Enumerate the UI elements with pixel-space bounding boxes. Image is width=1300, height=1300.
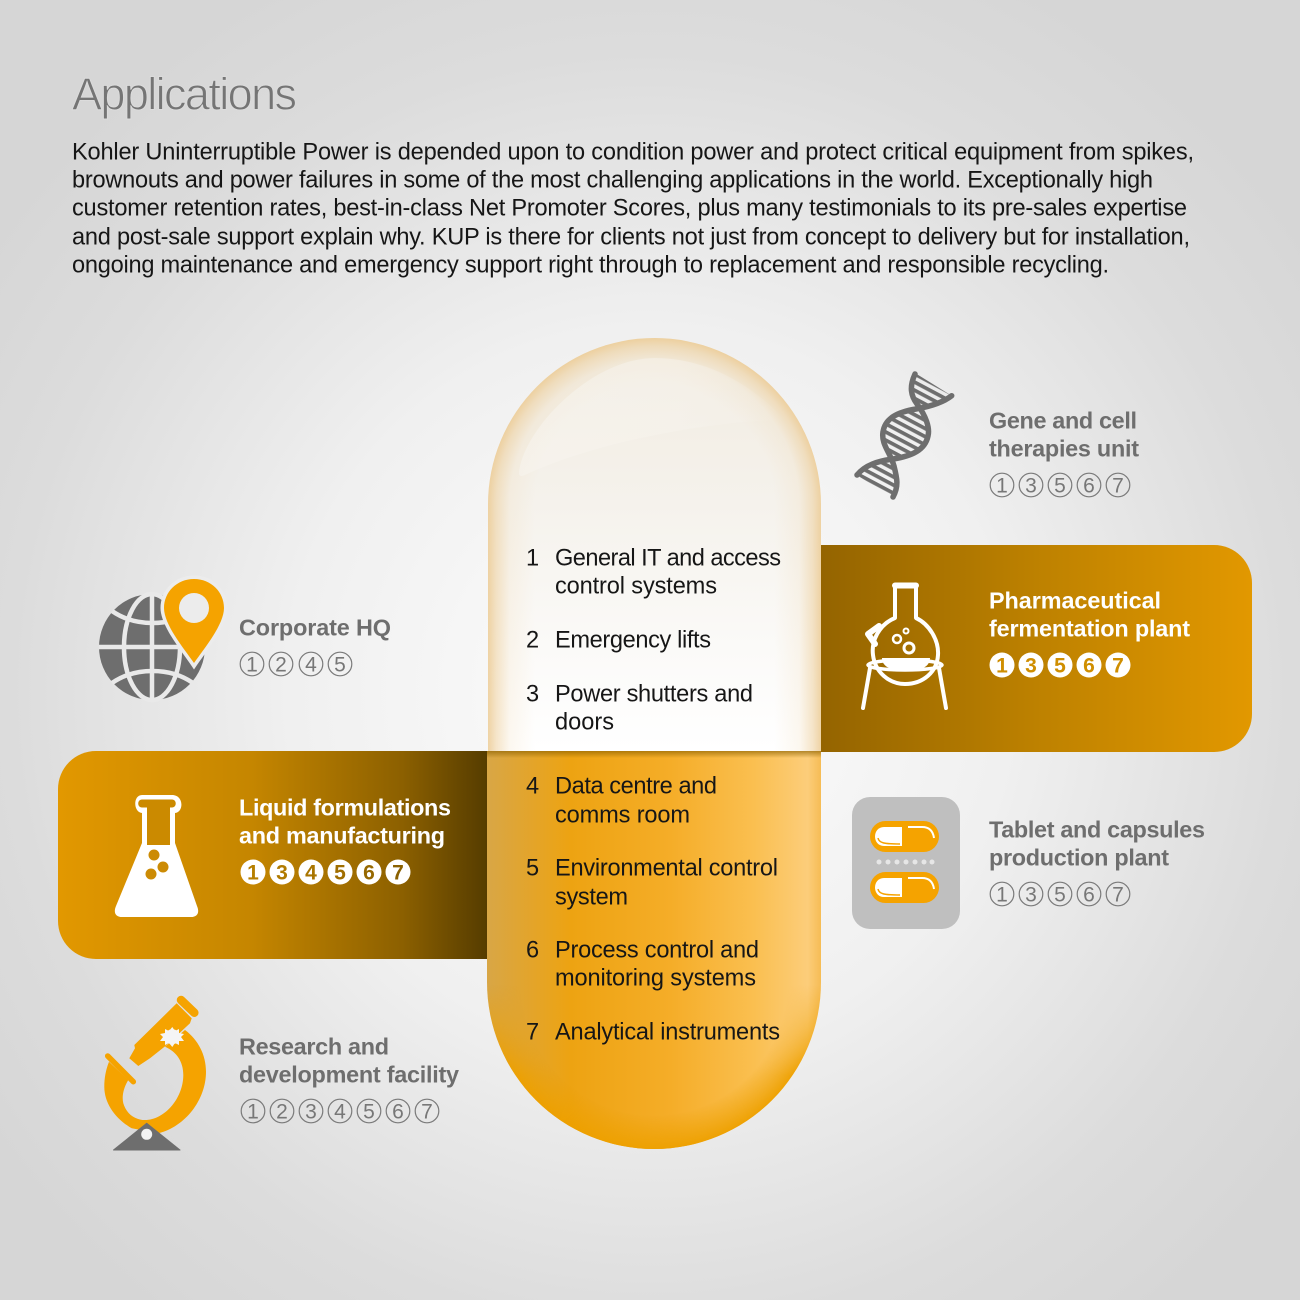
label: tablet and capsules: production plant xyxy=(989,844,1169,870)
intro text block: customer retention rates, best-in-class Net Promoter Scores, plus many testimonials to its pre-sales expertise xyxy=(72,195,1187,221)
reference numbers: 7 xyxy=(421,1100,433,1124)
reference numbers xyxy=(240,652,352,676)
icon: tablets and capsules xyxy=(852,797,960,929)
item 5: system xyxy=(555,884,628,910)
intro text block: and post-sale support explain why. KUP is there for clients not just from concept to delivery but for installation, xyxy=(72,224,1190,250)
capsule xyxy=(487,338,821,1149)
item 1: General IT and access xyxy=(555,545,781,571)
capsule upper half xyxy=(488,338,821,751)
reference numbers: 1 xyxy=(246,654,258,676)
reference numbers: 1 xyxy=(247,862,259,884)
label: research and development: Research and xyxy=(239,1033,389,1059)
item 1: 1 xyxy=(526,545,539,571)
label: corporate HQ xyxy=(239,614,391,676)
reference numbers: 5 xyxy=(363,1100,375,1124)
reference numbers: 4 xyxy=(305,862,317,884)
item 5 xyxy=(526,855,778,910)
reference numbers: 6 xyxy=(392,1100,404,1124)
reference numbers: 2 xyxy=(275,654,287,676)
reference numbers xyxy=(240,860,410,884)
title: Applications xyxy=(72,68,297,120)
reference numbers: 2 xyxy=(276,1100,288,1124)
capsule lower half xyxy=(487,751,821,1149)
label: pharmaceutical fermentation: fermentation plant xyxy=(989,615,1190,641)
label: liquid formulations: and manufacturing xyxy=(239,822,445,848)
reference numbers: 5 xyxy=(334,654,346,676)
label: gene and cell: Gene and cell xyxy=(989,407,1137,433)
item 5: 5 xyxy=(526,855,539,881)
reference numbers xyxy=(990,882,1130,906)
reference numbers: 1 xyxy=(996,884,1008,906)
reference numbers: 3 xyxy=(1025,884,1037,906)
reference numbers: 3 xyxy=(305,1100,317,1124)
reference numbers: 4 xyxy=(334,1100,346,1124)
icon: globe with location pin xyxy=(99,578,225,700)
reference numbers xyxy=(990,473,1130,498)
item 2: Emergency lifts xyxy=(555,627,711,653)
label: liquid formulations xyxy=(239,794,451,884)
intro text block: Kohler Uninterruptible Power is depended upon to condition power and protect critical equipment from spikes, xyxy=(72,139,1194,165)
intro text block: brownouts and power failures in some of the most challenging applications in the world. Exceptionally high xyxy=(72,167,1153,193)
label: pharmaceutical fermentation: Pharmaceutical xyxy=(989,587,1161,613)
reference numbers: 6 xyxy=(1083,654,1095,678)
reference numbers: 5 xyxy=(1054,474,1066,498)
icon: round flask on stand xyxy=(863,585,946,708)
label: corporate HQ: Corporate HQ xyxy=(239,614,391,640)
reference numbers: 5 xyxy=(334,862,346,884)
panel: pharmaceutical band xyxy=(821,545,1252,752)
item 7: 7 xyxy=(526,1019,539,1045)
reference numbers: 6 xyxy=(363,862,375,884)
intro text block: ongoing maintenance and emergency support right through to replacement and responsible recycling. xyxy=(72,252,1109,278)
item 3: 3 xyxy=(526,681,539,707)
label: gene and cell xyxy=(989,407,1139,498)
item 4: comms room xyxy=(555,802,690,828)
item 2: 2 xyxy=(526,627,539,653)
item 7: Analytical instruments xyxy=(555,1019,780,1045)
item 5: Environmental control xyxy=(555,855,778,881)
reference numbers: 3 xyxy=(1025,474,1037,498)
label: pharmaceutical fermentation xyxy=(989,587,1190,678)
reference numbers: 5 xyxy=(1054,884,1066,906)
reference numbers: 5 xyxy=(1054,654,1066,678)
reference numbers: 1 xyxy=(996,654,1008,678)
reference numbers: 1 xyxy=(247,1100,259,1124)
label: research and development: development facility xyxy=(239,1061,459,1087)
reference numbers: 4 xyxy=(305,654,317,676)
item 3 xyxy=(526,681,753,735)
reference numbers: 6 xyxy=(1083,884,1095,906)
item 4 xyxy=(526,773,717,828)
reference numbers: 7 xyxy=(392,862,404,884)
icon: conical flask xyxy=(115,795,198,917)
reference numbers: 3 xyxy=(276,862,288,884)
label: research and development xyxy=(239,1033,459,1124)
label: tablet and capsules xyxy=(989,816,1205,906)
item 3: doors xyxy=(555,709,614,735)
item 6: 6 xyxy=(526,937,539,963)
reference numbers: 1 xyxy=(996,474,1008,498)
item 6: monitoring systems xyxy=(555,965,756,991)
intro text block xyxy=(72,139,1194,278)
label: gene and cell: therapies unit xyxy=(989,435,1139,461)
item 4: Data centre and xyxy=(555,773,717,799)
reference numbers: 7 xyxy=(1112,654,1124,678)
item 6: Process control and xyxy=(555,937,759,963)
numbered list xyxy=(526,545,781,1045)
panel: liquid formulations band xyxy=(58,751,488,959)
label: tablet and capsules: Tablet and capsules xyxy=(989,816,1205,842)
reference numbers: 3 xyxy=(1025,654,1037,678)
item 1 xyxy=(526,545,781,599)
reference numbers xyxy=(241,1099,439,1124)
reference numbers xyxy=(990,652,1130,678)
reference numbers: 7 xyxy=(1112,474,1124,498)
item 3: Power shutters and xyxy=(555,681,753,707)
icon: DNA helix xyxy=(857,373,952,498)
reference numbers: 6 xyxy=(1083,474,1095,498)
item 4: 4 xyxy=(526,773,539,799)
label: liquid formulations: Liquid formulations xyxy=(239,794,451,820)
reference numbers: 7 xyxy=(1112,884,1124,906)
icon: microscope xyxy=(104,1000,206,1150)
item 6 xyxy=(526,937,759,991)
item 1: control systems xyxy=(555,573,717,599)
